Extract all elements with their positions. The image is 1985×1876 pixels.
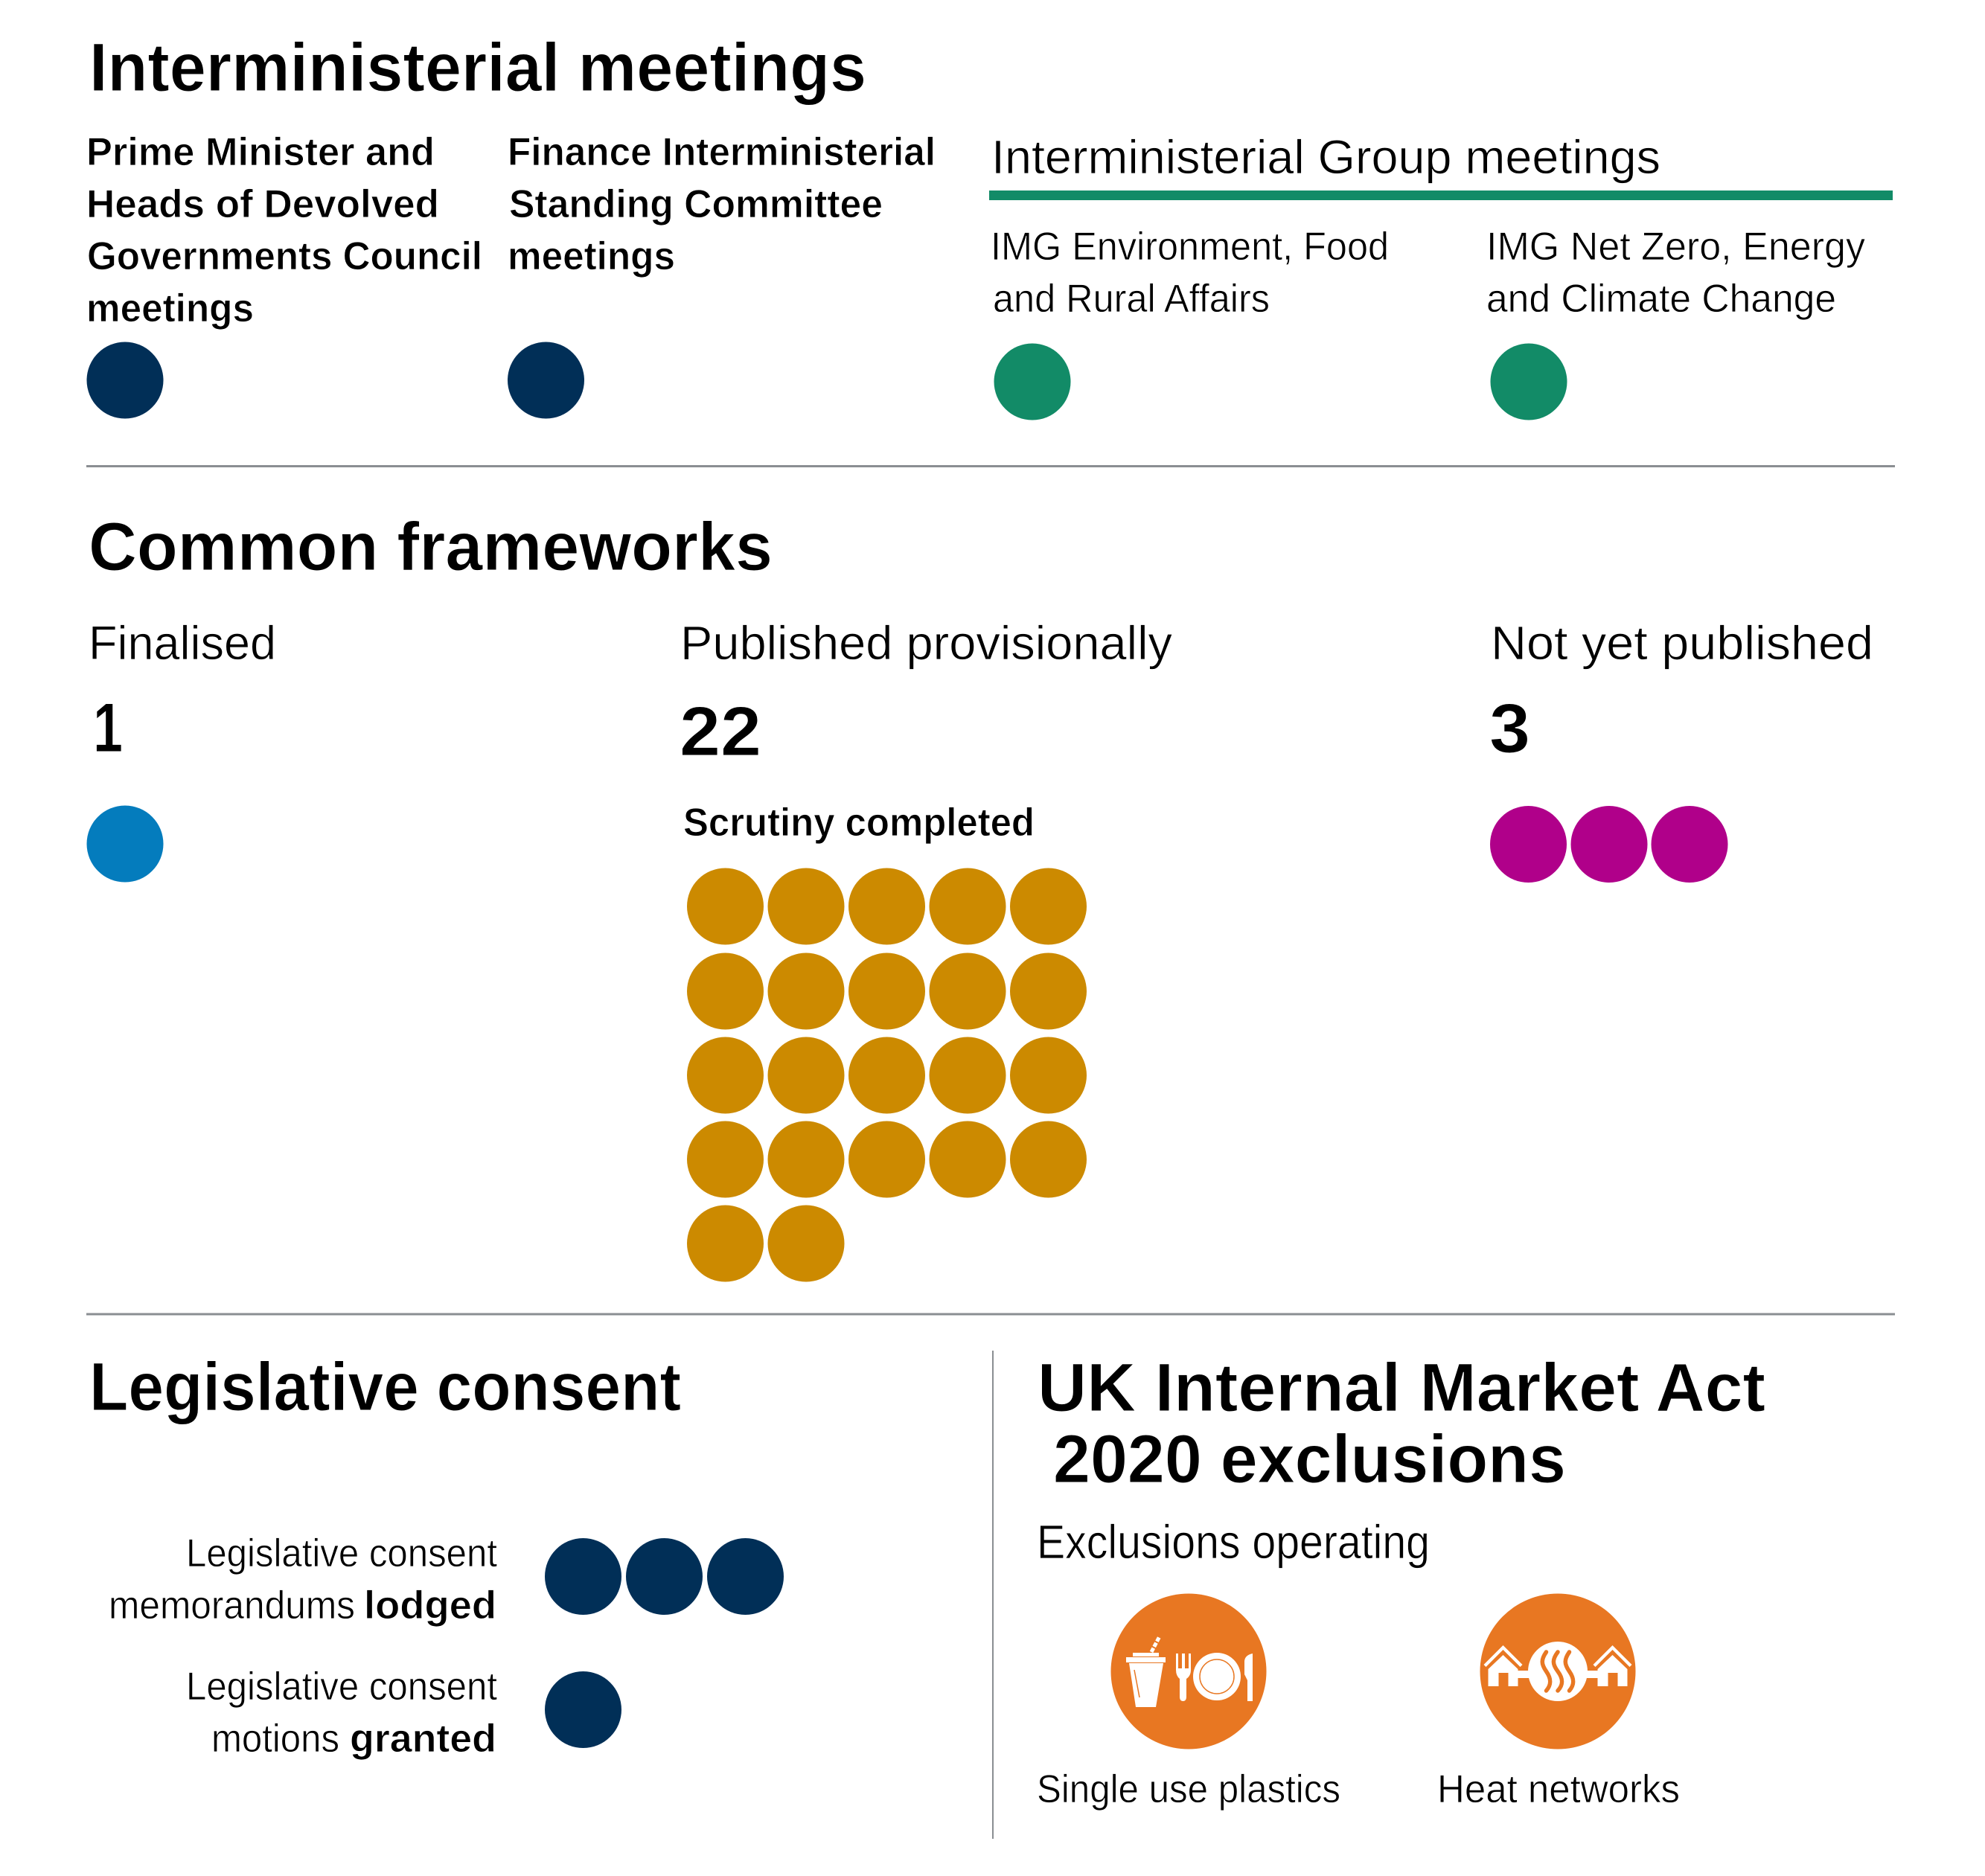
section: interministerial meetings bbox=[86, 30, 1893, 420]
dots: not yet published bbox=[1490, 806, 1728, 883]
title: interministerial meetings: Interministerial meetings bbox=[89, 30, 866, 106]
title: common frameworks: Common frameworks bbox=[89, 509, 773, 585]
label: published provisionally: Published provisionally bbox=[680, 616, 1172, 670]
number: 22: 22 bbox=[680, 692, 761, 770]
label: legislative consent motions granted: motions bbox=[211, 1717, 339, 1761]
section: common frameworks bbox=[86, 509, 1873, 1281]
label: legislative consent memorandums lodged: lodged bbox=[364, 1584, 496, 1627]
label: legislative consent motions granted: Legislative consent bbox=[186, 1665, 497, 1709]
number: 3: 3 bbox=[1489, 689, 1530, 767]
label: IMG environment, food and rural affairs bbox=[991, 225, 1389, 321]
dot: IMG net zero bbox=[1490, 344, 1567, 420]
label: legislative consent memorandums lodged bbox=[109, 1531, 497, 1627]
title: UK internal market act 2020 exclusions: 2020 exclusions bbox=[1053, 1421, 1566, 1497]
label: legislative consent memorandums lodged: memorandums bbox=[109, 1584, 355, 1627]
heading: interministerial group meetings: Interministerial Group meetings bbox=[991, 130, 1660, 184]
column: published provisionally bbox=[680, 616, 1172, 1281]
title: UK internal market act 2020 exclusions: UK Internal Market Act bbox=[1038, 1350, 1765, 1426]
dot: finalised bbox=[86, 805, 164, 883]
title: legislative consent: Legislative consent bbox=[89, 1349, 681, 1425]
section: UK internal market act exclusions bbox=[1037, 1350, 1765, 1811]
subheading: exclusions operating: Exclusions operating bbox=[1037, 1515, 1430, 1569]
label: IMG environment, food and rural affairs: and Rural Affairs bbox=[993, 277, 1270, 321]
dot grid: 22 scrutiny completed bbox=[687, 868, 1087, 1281]
label: heat networks: Heat networks bbox=[1437, 1767, 1680, 1811]
label: legislative consent memorandums lodged: Legislative consent bbox=[186, 1531, 497, 1575]
dot: motions granted bbox=[545, 1671, 621, 1748]
column: not yet published bbox=[1489, 616, 1873, 883]
label: finance interministerial standing committee meetings bbox=[508, 130, 936, 278]
label: prime minister and heads of devolved governments council meetings: Prime Minister and bbox=[86, 130, 435, 174]
label: single use plastics: Single use plastics bbox=[1037, 1767, 1340, 1811]
label: IMG net zero, energy and climate change bbox=[1486, 225, 1865, 321]
number: 1: 1 bbox=[93, 688, 123, 766]
label: prime minister and heads of devolved governments council meetings: Heads of Devolved bbox=[86, 182, 439, 226]
label: finance interministerial standing committee meetings: Finance Interministerial bbox=[508, 130, 936, 174]
label: finance interministerial standing committee meetings: meetings bbox=[508, 234, 675, 278]
label: finalised: Finalised bbox=[89, 616, 276, 670]
label: prime minister and heads of devolved governments council meetings: Governments Council bbox=[87, 234, 482, 278]
title: UK internal market act 2020 exclusions bbox=[1038, 1350, 1765, 1497]
label: prime minister and heads of devolved governments council meetings bbox=[86, 130, 482, 330]
label: IMG net zero, energy and climate change: IMG Net Zero, Energy bbox=[1486, 225, 1865, 269]
dot: prime minister council meeting bbox=[86, 342, 164, 418]
dots: memorandums lodged bbox=[545, 1538, 784, 1615]
label: not yet published: Not yet published bbox=[1491, 616, 1873, 670]
dot: IMG environment bbox=[994, 344, 1070, 420]
column: finalised bbox=[86, 616, 276, 883]
subheading: scrutiny completed: Scrutiny completed bbox=[683, 801, 1035, 845]
section: legislative consent bbox=[89, 1349, 784, 1761]
icon: heat networks bbox=[1480, 1594, 1636, 1749]
label: legislative consent motions granted: granted bbox=[350, 1717, 496, 1761]
label: prime minister and heads of devolved governments council meetings: meetings bbox=[86, 286, 254, 330]
label: IMG net zero, energy and climate change: and Climate Change bbox=[1486, 277, 1836, 321]
label: IMG environment, food and rural affairs: IMG Environment, Food bbox=[991, 225, 1389, 269]
icon: single use plastics bbox=[1110, 1594, 1267, 1749]
label: legislative consent motions granted bbox=[186, 1665, 497, 1761]
green rule under group heading bbox=[989, 191, 1893, 200]
dot: finance committee meeting bbox=[508, 342, 584, 418]
label: finance interministerial standing committee meetings: Standing Committee bbox=[509, 182, 883, 226]
